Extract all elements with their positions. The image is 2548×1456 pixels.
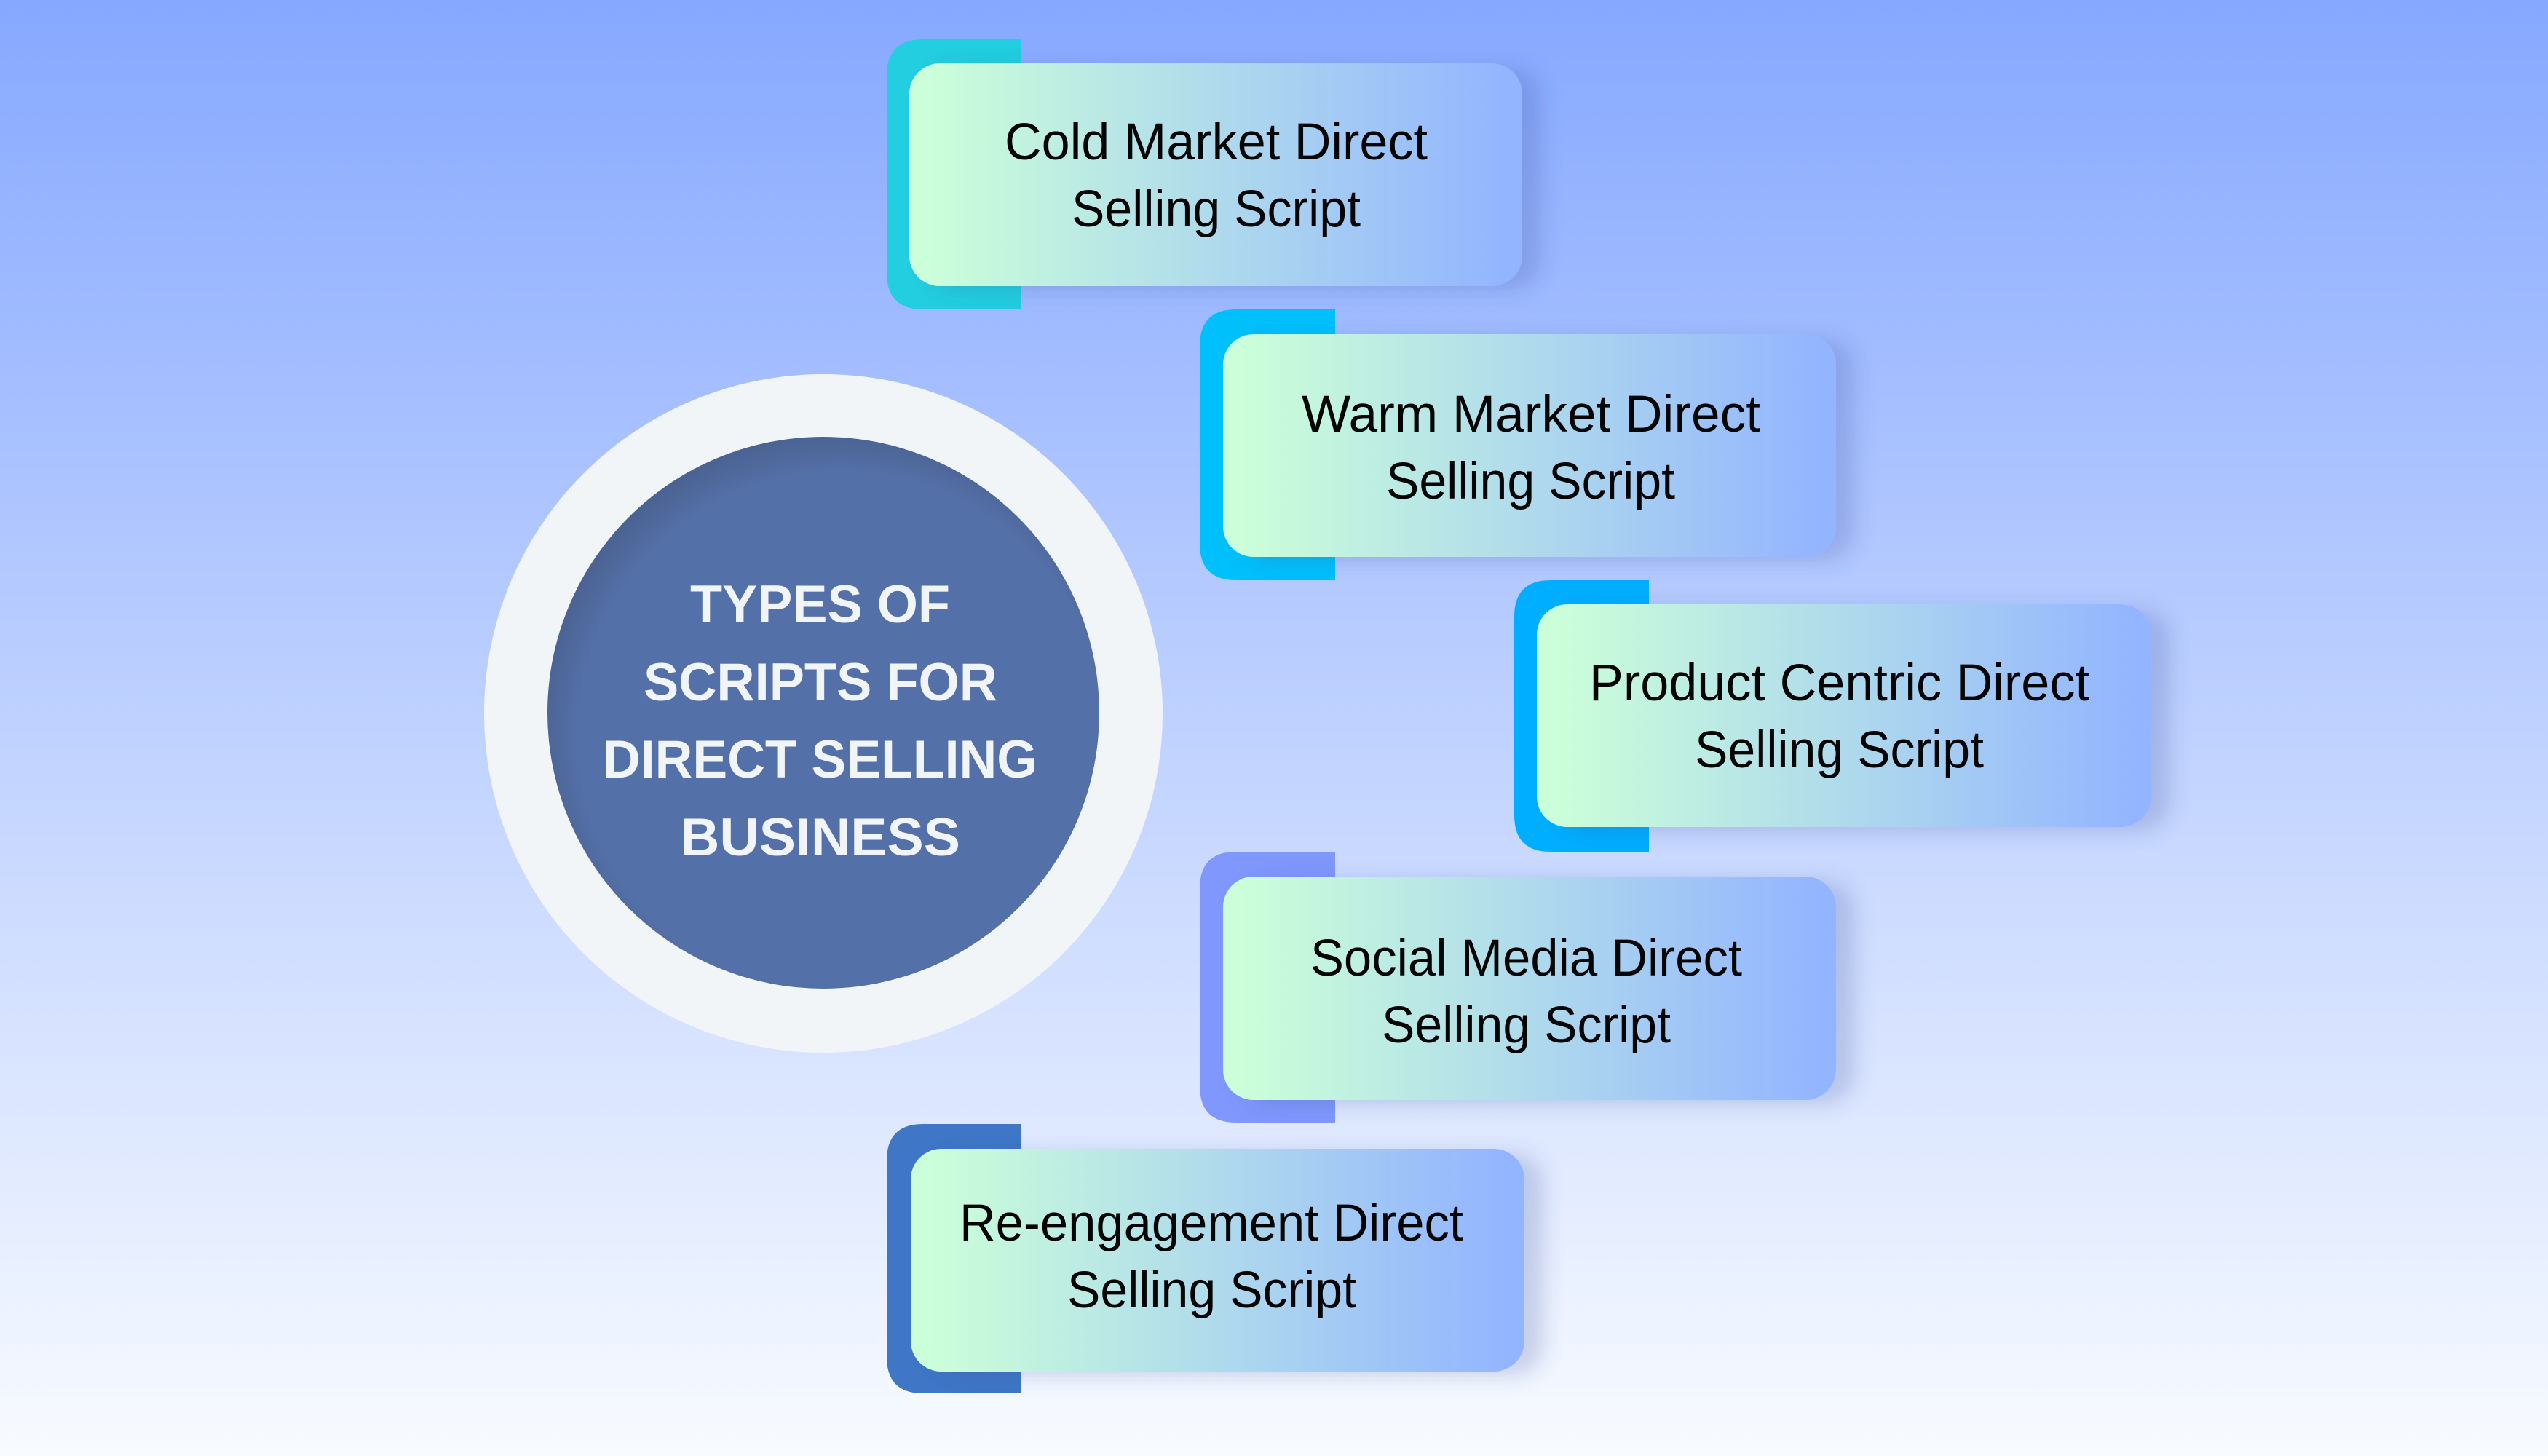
central circle [484,374,1163,1053]
panel: social media [1200,852,1836,1123]
panel: cold market [887,39,1522,309]
bracket: sky blue [1200,309,1335,580]
title [603,575,1037,867]
text: re-engagement: Selling Script [1067,1262,1356,1319]
bracket: teal [887,39,1021,309]
outer ring [484,374,1163,1053]
card: social media [1223,877,1836,1100]
panel: re-engagement [887,1124,1524,1393]
text: warm market [1302,386,1760,510]
card: re-engagement [911,1149,1524,1372]
bracket: periwinkle [1200,852,1335,1123]
bracket: azure [1514,580,1649,852]
text: cold market: Selling Script [1072,181,1361,238]
text: social media [1310,930,1742,1054]
text: warm market: Selling Script [1386,453,1675,510]
panel: warm market [1200,309,1836,580]
text: social media: Social Media Direct [1310,930,1742,987]
title: SCRIPTS FOR [644,653,997,712]
title: BUSINESS [680,808,960,867]
text: social media: Selling Script [1382,997,1671,1054]
text: re-engagement [960,1195,1463,1319]
title: TYPES OF [690,575,950,634]
text: re-engagement: Re-engagement Direct [960,1195,1463,1252]
panel: product centric [1514,580,2151,852]
card: warm market [1223,334,1836,557]
inner disc [547,437,1099,989]
text: cold market: Cold Market Direct [1005,114,1428,171]
card: product centric [1537,604,2151,827]
bracket: blue [887,1124,1021,1393]
text: product centric [1589,654,2089,779]
text: product centric: Product Centric Direct [1589,654,2089,712]
text: warm market: Warm Market Direct [1302,386,1760,443]
title: DIRECT SELLING [603,730,1037,789]
text: cold market [1005,114,1428,238]
card: cold market [909,63,1522,286]
text: product centric: Selling Script [1695,721,1984,779]
